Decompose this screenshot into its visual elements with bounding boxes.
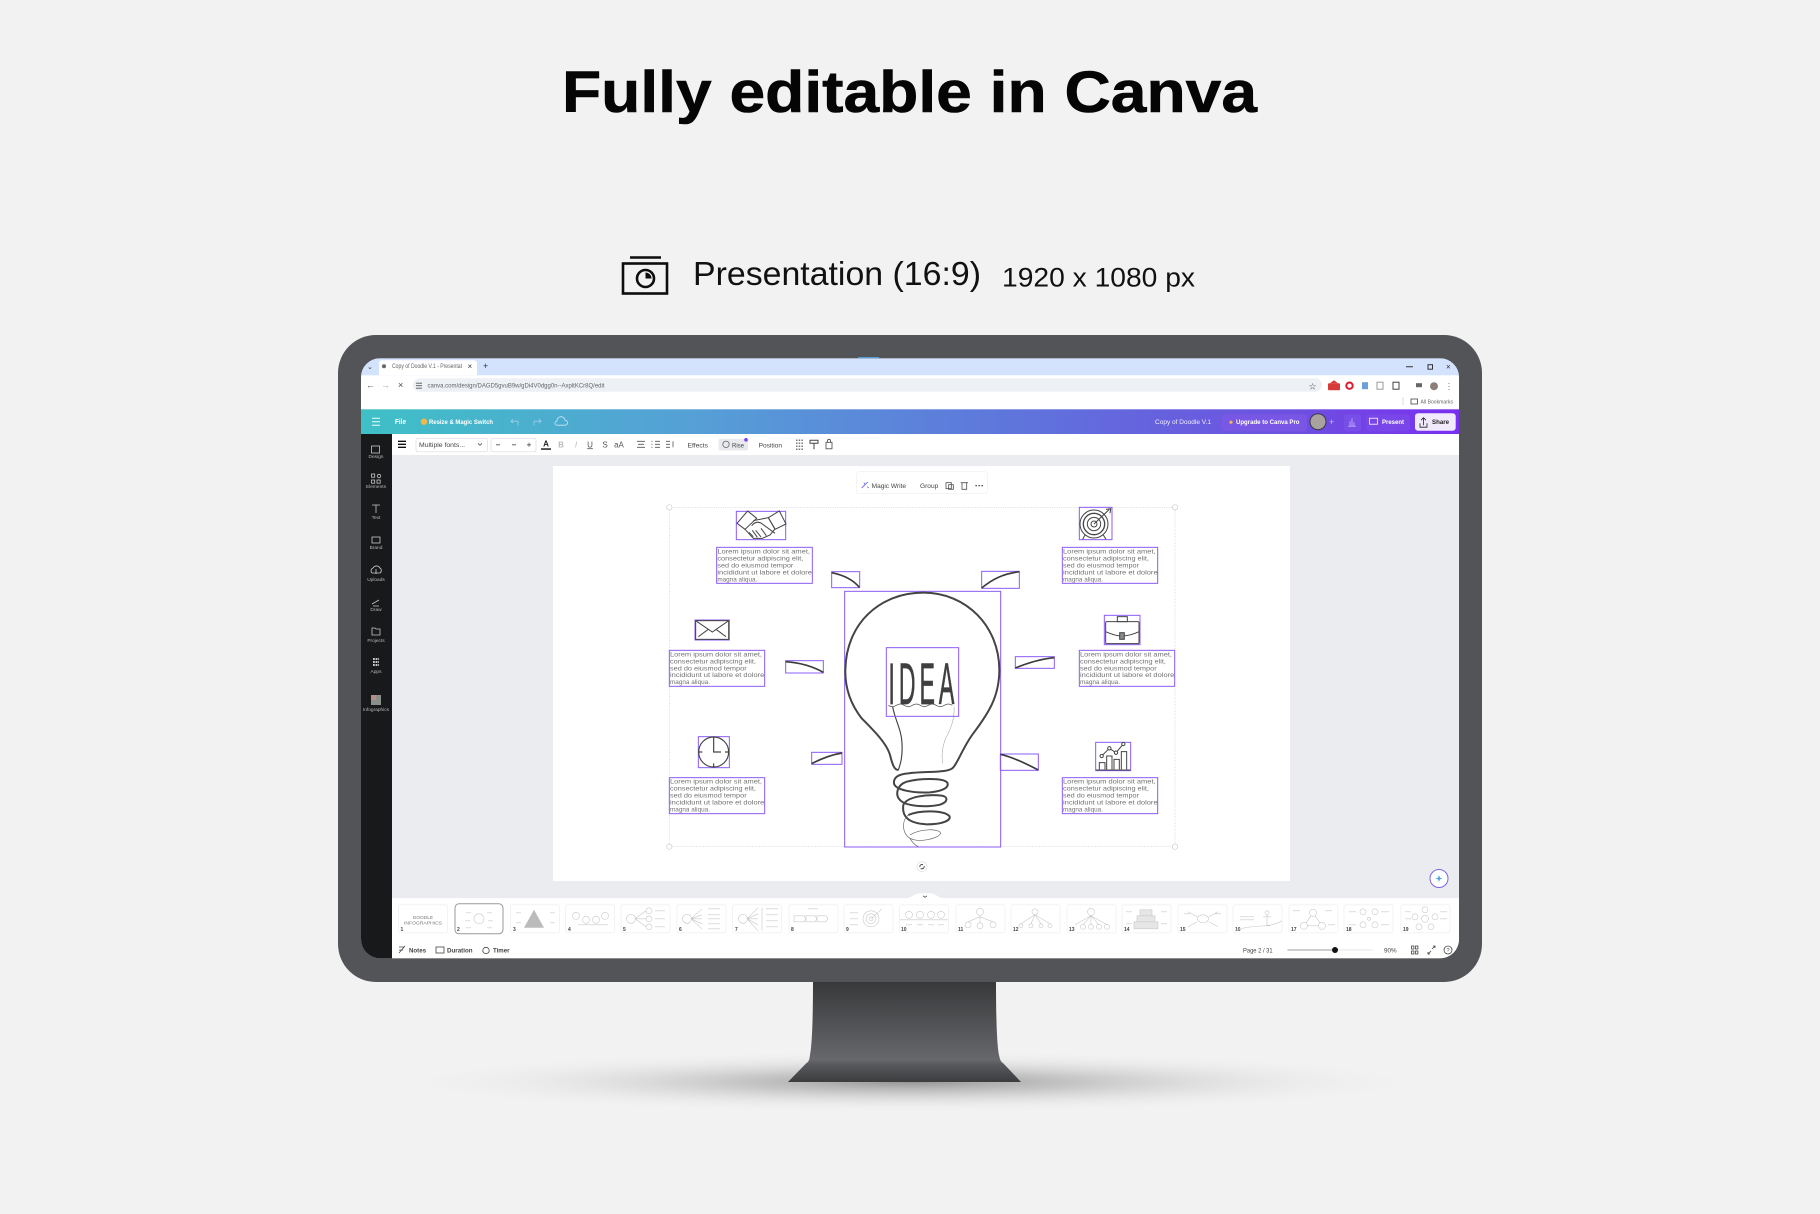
- text block: top right: Lorem ipsum dolor sit amet,: [1063, 548, 1156, 555]
- editor footer bar: [399, 946, 1452, 954]
- monitor camera notch: [858, 357, 879, 358]
- page thumbnail strip: 11: [958, 927, 964, 933]
- text block: top right: [1062, 547, 1158, 583]
- text block: middle left: consectetur adipiscing elit,: [670, 658, 756, 665]
- browser address bar: ←: [366, 380, 375, 390]
- editor side navigation: Infographics: [363, 707, 390, 713]
- text formatting toolbar: [398, 438, 832, 452]
- text formatting toolbar: Multiple fonts...: [419, 442, 465, 449]
- editor side navigation: Elements: [366, 484, 387, 490]
- text block: top right: sed do eiusmod tempor: [1063, 562, 1140, 569]
- icon: handshake: [736, 511, 786, 540]
- browser address bar: [366, 378, 1449, 392]
- editor side navigation: Uploads: [367, 577, 385, 583]
- bookmarks bar: [1403, 397, 1453, 406]
- header controls: +: [1329, 417, 1334, 427]
- browser tab and window controls: ×: [1446, 363, 1451, 372]
- browser tab and window controls: +: [483, 361, 488, 371]
- text block: bottom right: incididunt ut labore et dolore: [1063, 799, 1158, 806]
- floating context menu: [857, 472, 987, 494]
- icon: bar chart: [1096, 742, 1131, 771]
- page thumbnail strip: 7: [735, 927, 738, 933]
- floating context menu: Magic Write: [872, 483, 906, 490]
- page thumbnail strip: DOODLE: [413, 915, 433, 921]
- editor footer bar: Timer: [493, 948, 510, 954]
- text block: top left: magna aliqua.: [717, 576, 757, 583]
- browser tab and window controls: Copy of Doodle V.1 - Presentat: [392, 363, 462, 370]
- text formatting toolbar: Rise: [732, 442, 744, 449]
- text block: top left: [717, 547, 812, 583]
- page thumbnail strip: 19: [1403, 927, 1409, 933]
- connector curves: [786, 571, 1054, 770]
- assistant button: [1430, 870, 1448, 888]
- text formatting toolbar: I: [575, 440, 578, 449]
- page thumbnail strip: 14: [1124, 927, 1130, 933]
- page thumbnail strip: 15: [1180, 927, 1186, 933]
- shadow under monitor: [380, 1050, 1440, 1114]
- text block: bottom left: consectetur adipiscing elit,: [670, 786, 756, 793]
- icon: clock: [698, 737, 729, 768]
- icon: envelope: [695, 620, 729, 640]
- editor side navigation: Draw: [370, 607, 382, 613]
- text formatting toolbar: U: [587, 440, 593, 449]
- header controls: Share: [1432, 419, 1449, 426]
- text block: top right: incididunt ut labore et dolore: [1063, 569, 1158, 576]
- text block: bottom right: magna aliqua.: [1063, 806, 1103, 813]
- monitor stand: [788, 981, 1021, 1082]
- bookmarks bar: All Bookmarks: [1420, 400, 1453, 406]
- text block: bottom right: [1062, 778, 1158, 814]
- text block: top right: magna aliqua.: [1063, 576, 1103, 583]
- page thumbnail strip: 2: [457, 927, 460, 933]
- text block: middle left: magna aliqua.: [670, 679, 710, 686]
- editor footer bar: Duration: [447, 948, 473, 954]
- text block: middle right: Lorem ipsum dolor sit amet,: [1080, 651, 1172, 658]
- editor footer bar: Page 2 / 31: [1243, 948, 1273, 954]
- text block: top left: Lorem ipsum dolor sit amet,: [717, 548, 810, 555]
- browser tab bar: [361, 358, 1459, 375]
- editor side navigation: [361, 434, 392, 959]
- page thumbnail strip: 1: [400, 927, 404, 933]
- monitor frame: [338, 335, 1482, 982]
- canvas area: [392, 455, 1459, 898]
- format label: Presentation (16:9): [693, 255, 981, 292]
- page thumbnail strip: 16: [1235, 927, 1241, 933]
- text block: middle left: [669, 650, 765, 686]
- text formatting toolbar: A: [543, 439, 549, 448]
- text formatting toolbar: Effects: [688, 442, 709, 449]
- icon: presentation format: [623, 258, 667, 294]
- page thumbnail strip background: [392, 893, 1459, 959]
- slide page: [553, 466, 1290, 881]
- text block: middle right: incididunt ut labore et dolore: [1080, 672, 1175, 679]
- editor footer bar: Notes: [409, 948, 426, 954]
- light bulb: [845, 591, 1001, 847]
- browser tab and window controls: ×: [468, 362, 472, 371]
- canva header bar: [361, 409, 1459, 434]
- page thumbnail strip: 17: [1291, 927, 1297, 933]
- text block: bottom right: Lorem ipsum dolor sit amet,: [1063, 779, 1156, 786]
- editor footer bar: 90%: [1384, 948, 1397, 954]
- rotate handle: [917, 862, 927, 872]
- title: Fully editable in Canva: [562, 60, 1258, 125]
- page thumbnail strip: 8: [791, 927, 794, 933]
- browser address bar: ×: [398, 380, 403, 390]
- page thumbnail strip: 6: [679, 927, 682, 933]
- text formatting toolbar background: [392, 434, 1459, 455]
- browser address bar: ☆: [1308, 382, 1317, 392]
- text block: bottom right: consectetur adipiscing elit,: [1063, 786, 1149, 793]
- editor side navigation: Text: [372, 515, 381, 521]
- idea label: [886, 648, 959, 717]
- text block: top left: sed do eiusmod tempor: [717, 562, 794, 569]
- text block: middle right: sed do eiusmod tempor: [1080, 665, 1158, 672]
- text block: middle left: sed do eiusmod tempor: [670, 665, 748, 672]
- browser tab and window controls: ⌄: [367, 364, 373, 371]
- editor side navigation: Projects: [367, 638, 385, 644]
- format dimensions: 1920 x 1080 px: [1002, 263, 1195, 293]
- text block: middle right: [1079, 650, 1175, 686]
- page thumbnail strip: 3: [513, 927, 516, 933]
- icon: target: [1079, 507, 1112, 540]
- editor footer bar: ?: [1446, 948, 1450, 954]
- page thumbnail strip: [399, 896, 1450, 934]
- page thumbnail strip: 10: [901, 927, 907, 933]
- browser address bar: canva.com/design/DAGD5gvuB9w/gDi4V0dgg0n--AxpltKCr8Q/edit: [428, 383, 605, 390]
- text block: middle right: magna aliqua.: [1080, 679, 1120, 686]
- text formatting toolbar: B: [558, 440, 564, 449]
- text block: middle left: Lorem ipsum dolor sit amet,: [670, 651, 762, 658]
- page thumbnail strip: 9: [846, 927, 849, 933]
- header controls: Resize & Magic Switch: [429, 419, 493, 426]
- infographic selection on slide: [667, 472, 1178, 872]
- text block: bottom right: sed do eiusmod tempor: [1063, 793, 1140, 800]
- header controls: Present: [1382, 419, 1405, 426]
- page thumbnail strip: 5: [623, 927, 626, 933]
- text block: middle left: incididunt ut labore et dolore: [670, 672, 765, 679]
- page thumbnail strip: 4: [568, 927, 571, 933]
- text block: top right: consectetur adipiscing elit,: [1063, 555, 1149, 562]
- page thumbnail strip: 12: [1013, 927, 1019, 933]
- text formatting toolbar: aA: [614, 440, 625, 449]
- text block: bottom left: sed do eiusmod tempor: [670, 793, 748, 800]
- text block: middle right: consectetur adipiscing elit,: [1080, 658, 1166, 665]
- text block: top left: consectetur adipiscing elit,: [717, 555, 803, 562]
- page thumbnail strip: 18: [1346, 927, 1352, 933]
- text formatting toolbar: S: [602, 440, 608, 449]
- text block: bottom left: magna aliqua.: [670, 806, 710, 813]
- text block: bottom left: [669, 778, 765, 814]
- header controls: [372, 413, 1456, 431]
- text block: top left: incididunt ut labore et dolore: [717, 569, 812, 576]
- editor side navigation: Design: [369, 454, 384, 460]
- editor side navigation: Apps: [371, 669, 382, 675]
- text block: bottom left: Lorem ipsum dolor sit amet,: [670, 779, 762, 786]
- browser tab and window controls: [367, 360, 1451, 375]
- icon: briefcase: [1104, 615, 1140, 645]
- selection frame: [667, 505, 1178, 849]
- monitor screen: [361, 358, 1459, 959]
- browser address bar: →: [381, 380, 390, 390]
- infographic selection on slide: IDEA: [888, 652, 958, 717]
- text block: bottom left: incididunt ut labore et dolore: [670, 799, 765, 806]
- page thumbnail strip: INFOGRAPHICS: [404, 920, 442, 926]
- header controls: Copy of Doodle V.1: [1155, 419, 1211, 426]
- editor side navigation: Brand: [370, 545, 383, 551]
- floating context menu: Group: [920, 483, 939, 490]
- header controls: File: [395, 419, 406, 426]
- page thumbnail strip: 13: [1069, 927, 1075, 933]
- text formatting toolbar: Position: [759, 442, 782, 449]
- header controls: Upgrade to Canva Pro: [1236, 419, 1300, 426]
